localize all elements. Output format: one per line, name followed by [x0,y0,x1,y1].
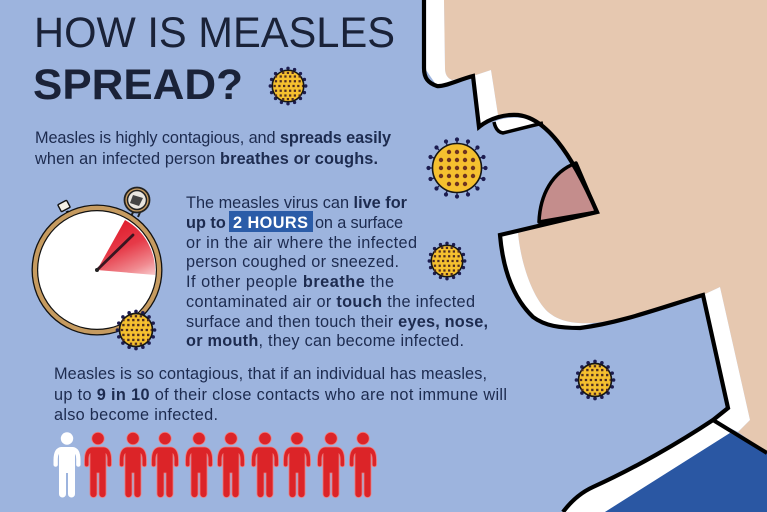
intro text [34,129,391,168]
forehead and nose white offset [426,0,473,86]
stopwatch [32,188,162,336]
crown knob [131,209,141,217]
explanation text: person coughed or sneezed. [186,253,399,271]
collar line [713,420,767,453]
virus icon: middle [428,242,466,280]
neck white offset [703,287,750,432]
shirt [605,433,767,512]
highlight: 2 hours [229,211,313,232]
contagious statistic text: up to 9 in 10 of their close contacts who are not immune will [54,386,507,404]
ring [32,204,162,336]
explanation text: up to [186,214,226,232]
people pictogram: 1 white, 9 red [54,432,376,498]
explanation text [186,194,488,350]
red time wedge [97,220,155,275]
face outline [424,0,728,512]
tongue [539,163,597,222]
title [33,9,395,109]
virus icon: neck [575,360,615,400]
intro text: when an infected person breathes or coughs. [34,150,378,168]
explanation text: or in the air where the infected [186,234,417,252]
virus icon: large near mouth [426,137,488,199]
explanation text: or mouth, they can become infected. [186,332,464,350]
title: HOW IS MEASLES [34,9,395,57]
explanation text: on a surface [315,214,403,232]
contagious statistic text: also become infected. [54,406,218,424]
jaw white offset [500,233,593,329]
upper teeth [494,118,543,133]
virus icon: on stopwatch [116,310,156,350]
shirt collar white band [563,420,738,512]
title: SPREAD? [33,61,243,109]
explanation text: The measles virus can live for [186,194,408,212]
explanation text: If other people breathe the [186,273,394,291]
upper lip white offset [473,70,498,126]
virus icon: next to title [269,67,307,105]
explanation text: contaminated air or touch the infected [186,293,475,311]
contagious statistic text [54,365,507,424]
explanation text: 2 HOURS [233,214,308,232]
contagious statistic text: Measles is so contagious, that if an individual has measles, [54,365,487,383]
hand [97,235,133,270]
left button [67,211,70,217]
explanation text: surface and then touch their eyes, nose, [186,313,488,331]
intro text: Measles is highly contagious, and spreads easily [35,129,391,147]
skin [444,0,767,453]
illustration: face profile [424,0,767,512]
